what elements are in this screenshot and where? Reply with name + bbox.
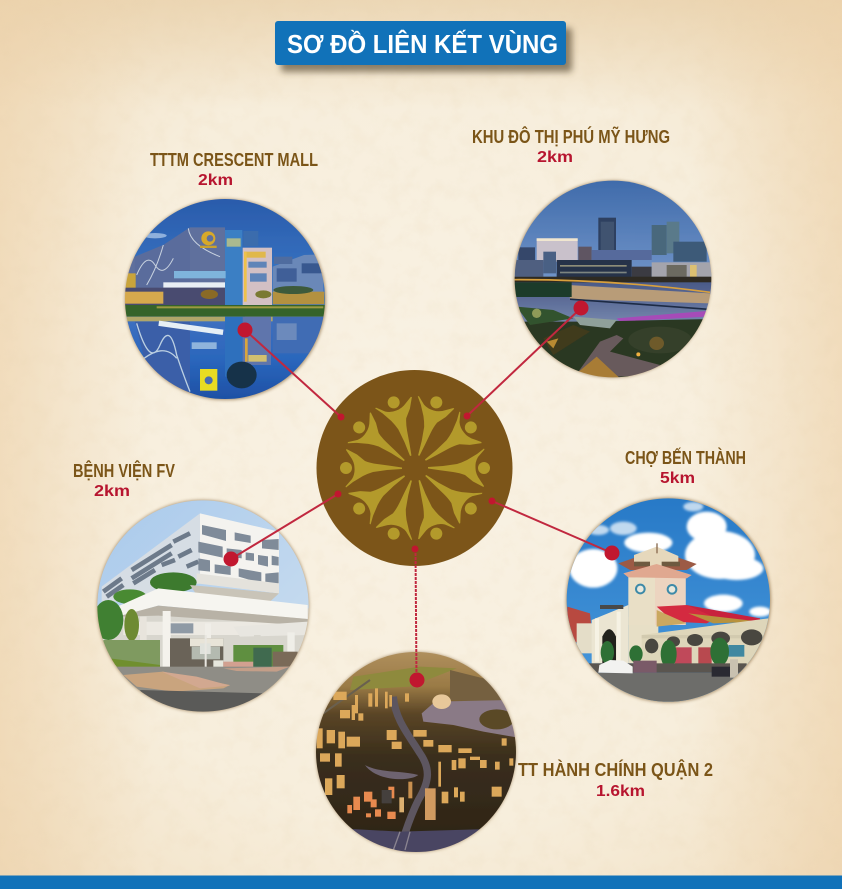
label: TTTM Crescent Mall [150,150,318,189]
label: TT hành chính Quận 2: TT HÀNH CHÍNH QUẬN 2 [518,759,713,780]
photo: Bệnh viện FV [90,495,317,723]
bottom blue bar [0,876,842,889]
label: Khu đô thị Phú Mỹ Hưng: KHU ĐÔ THỊ PHÚ MỸ HƯNG [472,126,670,147]
label: Chợ Bến Thành: CHỢ BẾN THÀNH [625,447,746,468]
title banner: SƠ ĐỒ LIÊN KẾT VÙNG [287,29,558,59]
label: TT hành chính Quận 2 [518,759,713,800]
label: TT hành chính Quận 2: 1.6km [596,783,645,800]
photo: Crescent Mall [120,195,333,403]
central emblem [316,370,512,566]
label: TTTM Crescent Mall: TTTM CRESCENT MALL [150,150,318,170]
label: Bệnh viện FV: 2km [94,483,130,500]
label: TTTM Crescent Mall: 2km [198,172,233,189]
label: Khu đô thị Phú Mỹ Hưng [472,126,670,166]
title banner [275,21,572,72]
label: Chợ Bến Thành: 5km [660,470,695,487]
connector lines [231,308,612,680]
photo: Chợ Bến Thành [560,490,780,710]
photo: Phú Mỹ Hưng [512,178,714,380]
photo: TT hành chính Quận 2 [310,650,527,863]
label: Khu đô thị Phú Mỹ Hưng: 2km [537,149,573,166]
label: Bệnh viện FV: BỆNH VIỆN FV [73,460,175,481]
label: Chợ Bến Thành [625,447,746,487]
label: Bệnh viện FV [73,460,175,500]
connector dots [224,300,620,688]
